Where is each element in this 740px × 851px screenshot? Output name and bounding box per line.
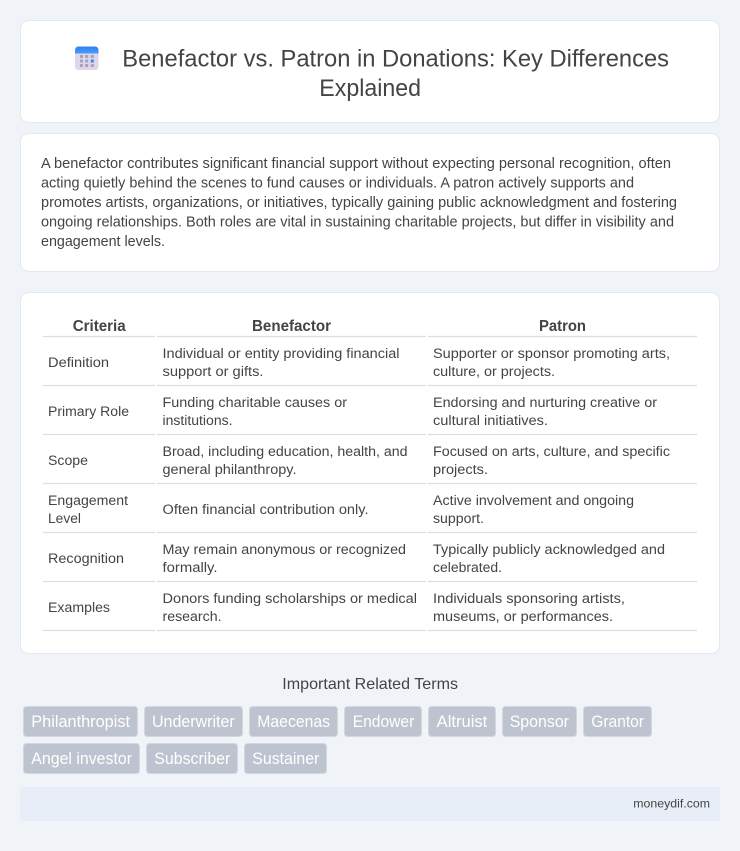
text block: summary: ongoing relationships. Both roles are vital in sustaining charitable projects, but differ in visibility and (41, 214, 674, 230)
icon: calendar (75, 46, 98, 70)
footer bar: moneydif.com (633, 797, 710, 811)
table header row (73, 318, 586, 335)
row: definition: support or gifts. (162, 364, 264, 380)
row: engagement level: Engagement (48, 493, 128, 509)
table header row: Patron (539, 318, 586, 335)
tags: related terms: Underwriter (152, 713, 235, 731)
row: primary role: Endorsing and nurturing creative or (433, 395, 657, 411)
row: engagement level: Level (48, 511, 81, 527)
row: examples: Donors funding scholarships or medical (162, 591, 417, 607)
row: recognition: May remain anonymous or recognized (162, 542, 406, 558)
row: examples: Individuals sponsoring artists, (433, 591, 625, 607)
row: engagement level: Often financial contribution only. (162, 502, 368, 518)
row: definition: Supporter or sponsor promoting arts, (433, 346, 670, 362)
row: primary role: Primary Role (48, 404, 129, 420)
row: primary role: institutions. (162, 413, 232, 429)
row: examples (48, 591, 625, 625)
title: Explained (319, 75, 421, 102)
row: scope: general philanthropy. (162, 462, 296, 478)
heading: important related terms: Important Related Terms (282, 676, 458, 693)
row: primary role: cultural initiatives. (433, 413, 548, 429)
tags: related terms: Altruist (437, 713, 488, 731)
tags: related terms: Philanthropist (31, 713, 130, 731)
panel: comparison table (20, 292, 720, 654)
title: Benefactor vs. Patron in Donations: Key Differences (122, 46, 669, 73)
title (122, 46, 669, 102)
table header row: Benefactor (252, 318, 331, 335)
table header row: Criteria (73, 318, 126, 335)
footer bar (20, 787, 720, 821)
text block: summary (41, 156, 677, 250)
row: scope: Broad, including education, health, and (162, 444, 408, 460)
tags: related terms: Grantor (591, 713, 645, 731)
row: examples: museums, or performances. (433, 609, 613, 625)
row: scope: Focused on arts, culture, and specific (433, 444, 670, 460)
tags: related terms (24, 706, 652, 774)
row: recognition: Recognition (48, 551, 124, 567)
row: recognition: celebrated. (433, 560, 502, 576)
text block: summary: promotes artists, organizations, or initiatives, typically gaining public acknowledgment and fostering (41, 195, 677, 211)
row: engagement level: support. (433, 511, 484, 527)
row: examples: Examples (48, 600, 110, 616)
row: engagement level: Active involvement and ongoing (433, 493, 634, 509)
row: primary role (48, 395, 657, 429)
tags: related terms: Maecenas (257, 713, 330, 731)
panel: summary paragraph (20, 134, 720, 272)
tags: related terms: Sponsor (510, 713, 570, 731)
row: engagement level (48, 493, 634, 527)
text block: summary: A benefactor contributes significant financial support without expecting personal recognition, often (41, 156, 671, 172)
row: primary role: Funding charitable causes or (162, 395, 347, 411)
row: definition (48, 346, 670, 380)
tags: related terms: Endower (353, 713, 415, 731)
row: scope (48, 444, 670, 478)
row: definition: culture, or projects. (433, 364, 555, 380)
tags: related terms: Sustainer (252, 750, 320, 768)
row: definition: Definition (48, 355, 109, 371)
panel: title card (20, 20, 720, 122)
row: recognition: formally. (162, 560, 218, 576)
row: recognition (48, 542, 665, 576)
tags: related terms: Angel investor (31, 750, 133, 768)
row: definition: Individual or entity providing financial (162, 346, 400, 362)
row: examples: research. (162, 609, 222, 625)
row: scope: projects. (433, 462, 488, 478)
tags: related terms: Subscriber (154, 750, 231, 768)
row: recognition: Typically publicly acknowledged and (433, 542, 665, 558)
text block: summary: acting quietly behind the scenes to fund causes or individuals. A patron actively supports and (41, 176, 634, 192)
text block: summary: engagement levels. (41, 234, 165, 250)
row: scope: Scope (48, 453, 88, 469)
